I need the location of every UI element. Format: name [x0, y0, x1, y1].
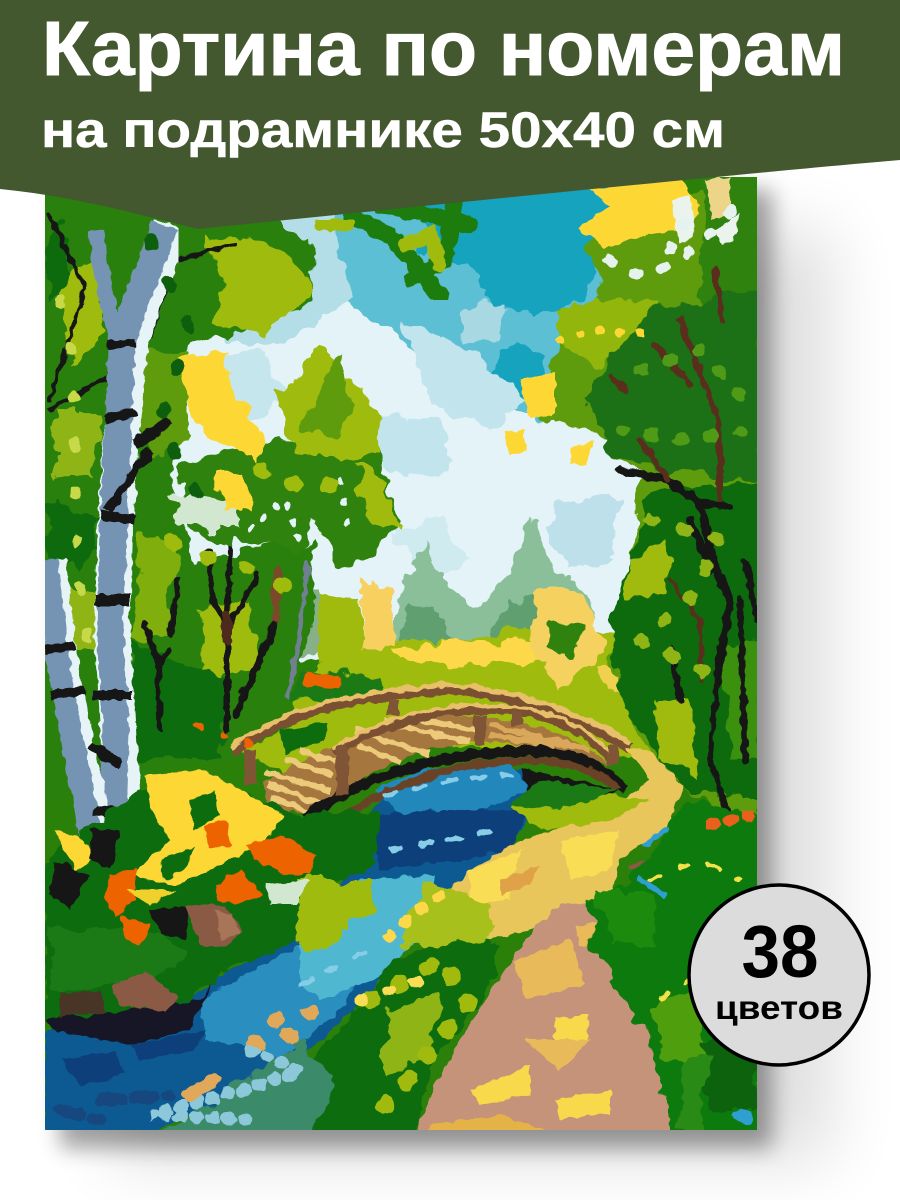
sunlit path — [435, 748, 682, 940]
yellow and orange flowers — [50, 770, 315, 945]
badge number: 38 — [742, 910, 818, 993]
distant meadow — [280, 578, 690, 760]
green header banner — [0, 0, 900, 229]
bridge underside — [522, 768, 618, 795]
right tree foliage — [540, 170, 760, 820]
bridge deck planks — [263, 716, 610, 815]
badge label: цветов — [715, 989, 843, 1026]
colour count badge — [689, 885, 869, 1065]
title: Картина по номерам — [42, 6, 845, 92]
river — [45, 763, 540, 1135]
paint dabs texture — [60, 200, 750, 1120]
yellow treetop dabs — [505, 178, 740, 465]
distant trees — [390, 515, 600, 650]
dirt path — [415, 900, 680, 1135]
painting: forest bridge landscape — [40, 170, 760, 1135]
wooden bridge — [230, 685, 630, 818]
bridge railing — [232, 689, 630, 752]
left and middle tree foliage — [45, 214, 403, 764]
foreground centre bushes and flowers — [150, 880, 500, 1135]
tree trunks and branches — [50, 215, 757, 815]
top centre branch foliage — [280, 200, 470, 295]
canvas drop shadow — [60, 190, 830, 1160]
left bank greenery — [45, 780, 380, 1020]
foreground right greenery — [590, 800, 760, 1135]
subtitle: на подрамнике 50х40 см — [41, 102, 725, 158]
rocks — [60, 855, 688, 1018]
sky and clouds — [140, 170, 680, 660]
birch trunks — [45, 225, 172, 860]
bridge interior greenery — [242, 695, 611, 774]
